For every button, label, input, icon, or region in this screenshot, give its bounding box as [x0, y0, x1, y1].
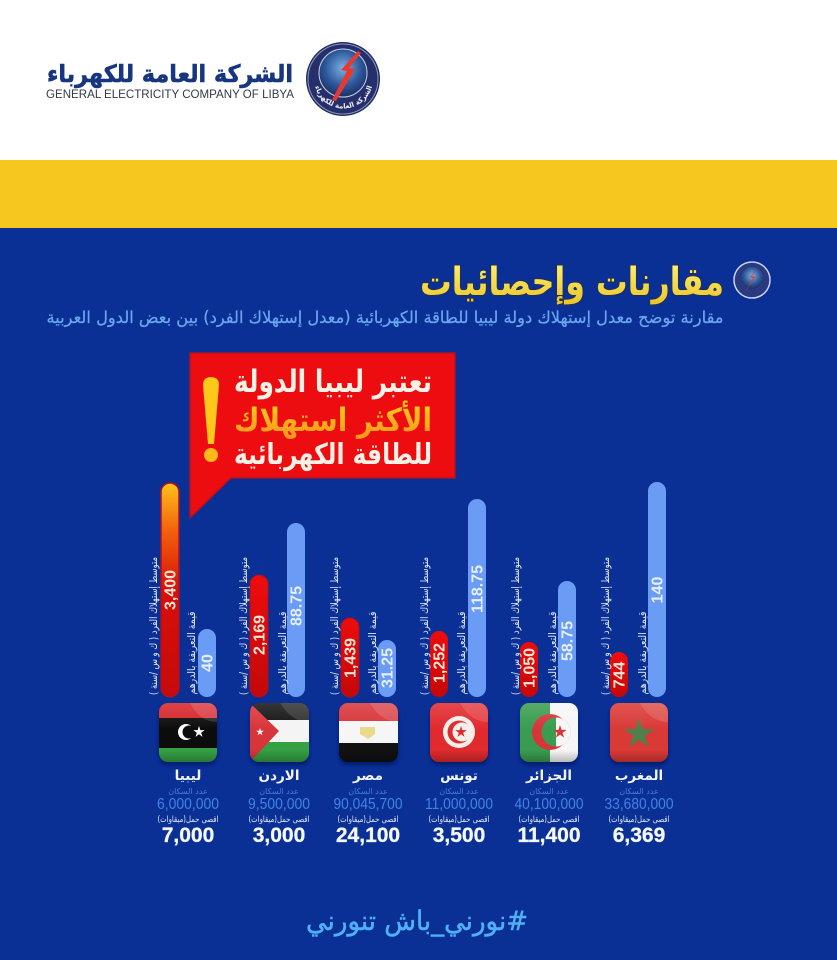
tariff axis label: قيمة التعريفة بالدرهم [547, 612, 559, 694]
population label: عدد السكان [348, 787, 388, 796]
tariff bar: 31.25 [380, 648, 396, 688]
tariff bar: 58.75 [560, 621, 576, 661]
logo wordmark Arabic: الشركة العامة للكهرباء [47, 60, 293, 88]
peak load value: 6,369 [613, 824, 665, 847]
flag: Egypt [339, 703, 398, 765]
heading text: مقارنات وإحصائيات [420, 260, 724, 305]
column: Libya [148, 483, 219, 847]
consumption bar [161, 483, 180, 697]
consumption axis label: متوسط إستهلاك الفرد ( ك و س /سنة ) [329, 557, 341, 695]
consumption axis label: متوسط إستهلاك الفرد ( ك و س /سنة ) [238, 557, 250, 695]
peak load value: 3,500 [433, 824, 485, 847]
country name: ليبيا [175, 768, 201, 784]
consumption axis label: متوسط إستهلاك الفرد ( ك و س /سنة ) [510, 557, 522, 695]
peak load value: 3,000 [253, 824, 305, 847]
subtitle: مقارنة توضح معدل إستهلاك دولة ليبيا للطاقة الكهربائية (معدل إستهلاك الفرد) بين بعض الدول العربية [46, 308, 724, 328]
country name: الاردن [259, 768, 299, 784]
section heading [420, 260, 770, 305]
population value: 40,100,000 [514, 796, 584, 813]
population value: 11,000,000 [425, 796, 493, 813]
peak load value: 24,100 [336, 824, 400, 847]
population label: عدد السكان [439, 787, 479, 796]
peak load label: اقصى حمل(ميقاوات) [158, 815, 218, 825]
peak load label: اقصى حمل(ميقاوات) [248, 815, 310, 825]
column: Egypt [329, 557, 403, 847]
tariff axis label: قيمة التعريفة بالدرهم [367, 612, 379, 694]
consumption bar [610, 652, 628, 697]
column: Algeria [510, 557, 584, 847]
peak load label: اقصى حمل(ميقاوات) [428, 815, 490, 825]
tariff bar: 140 [650, 577, 666, 603]
company logo [46, 42, 380, 116]
flag: Algeria [520, 703, 578, 765]
tariff bar [558, 581, 576, 697]
consumption axis label: متوسط إستهلاك الفرد ( ك و س /سنة ) [148, 557, 160, 695]
peak load value: 11,400 [517, 824, 581, 847]
population label: عدد السكان [259, 787, 299, 796]
logo emblem: الشركة العامة للكهرباء [315, 86, 372, 109]
consumption bar [250, 575, 268, 697]
column: Morocco [600, 482, 674, 847]
callout line 3: للطاقة الكهربائية [234, 437, 432, 471]
tariff bar: 118.75 [470, 565, 486, 613]
yellow band [0, 160, 837, 228]
consumption bar: 744 [612, 662, 628, 688]
peak load label: اقصى حمل(ميقاوات) [608, 815, 670, 825]
page background: white header [0, 0, 837, 160]
tariff bar: 40 [200, 654, 216, 672]
column: Tunisia [419, 499, 493, 847]
population label: عدد السكان [168, 787, 208, 796]
population value: 33,680,000 [604, 796, 674, 813]
consumption bar: 1,439 [342, 638, 360, 678]
peak load label: اقصى حمل(ميقاوات) [518, 815, 580, 825]
flag: Tunisia [430, 703, 488, 765]
tariff bar [648, 482, 666, 697]
population label: عدد السكان [529, 787, 569, 796]
consumption axis label: متوسط إستهلاك الفرد ( ك و س /سنة ) [600, 557, 612, 695]
consumption bar [430, 631, 448, 697]
blue main panel [0, 228, 837, 960]
tariff bar [198, 629, 216, 697]
tariff axis label: قيمة التعريفة بالدرهم [277, 612, 289, 694]
tariff axis label: قيمة التعريفة بالدرهم [186, 612, 198, 694]
tariff axis label: قيمة التعريفة بالدرهم [637, 612, 649, 694]
logo wordmark English: GENERAL ELECTRICITY COMPANY OF LIBYA [46, 89, 294, 101]
tariff axis label: قيمة التعريفة بالدرهم [456, 612, 468, 694]
consumption axis label: متوسط إستهلاك الفرد ( ك و س /سنة ) [419, 557, 431, 695]
population value: 90,045,700 [334, 796, 403, 813]
consumption bar: 1,050 [522, 648, 538, 688]
population label: عدد السكان [619, 787, 659, 796]
population value: 9,500,000 [248, 796, 310, 813]
country name: الجزائر [525, 768, 572, 784]
peak load label: اقصى حمل(ميقاوات) [338, 815, 398, 825]
flag: Jordan [250, 703, 309, 765]
icon: exclamation mark [203, 377, 219, 462]
flag: Morocco [610, 703, 668, 765]
hashtag: #نورني_باش تنورني [306, 906, 528, 937]
consumption bar [341, 618, 360, 697]
tariff bar [378, 640, 396, 697]
flag: Libya [159, 703, 217, 765]
consumption bar: 1,252 [432, 643, 448, 683]
tariff bar [468, 499, 486, 697]
country name: تونس [440, 768, 478, 784]
column: Jordan [238, 523, 310, 847]
tariff bar: 88.75 [288, 586, 306, 626]
consumption bar [520, 642, 538, 697]
consumption bar: 2,169 [252, 615, 268, 655]
tariff bar [287, 523, 306, 697]
callout line 2: الأكثر استهلاك [234, 400, 432, 439]
peak load value: 7,000 [162, 824, 214, 847]
callout: Libya highest consumer [190, 353, 455, 518]
population value: 6,000,000 [157, 796, 219, 813]
country name: المغرب [615, 768, 663, 784]
logo emblem [306, 42, 380, 116]
consumption bar: 3,400 [162, 570, 180, 610]
heading icon [734, 262, 770, 298]
callout line 1: تعتبر ليبيا الدولة [234, 364, 432, 400]
country name: مصر [352, 768, 383, 784]
